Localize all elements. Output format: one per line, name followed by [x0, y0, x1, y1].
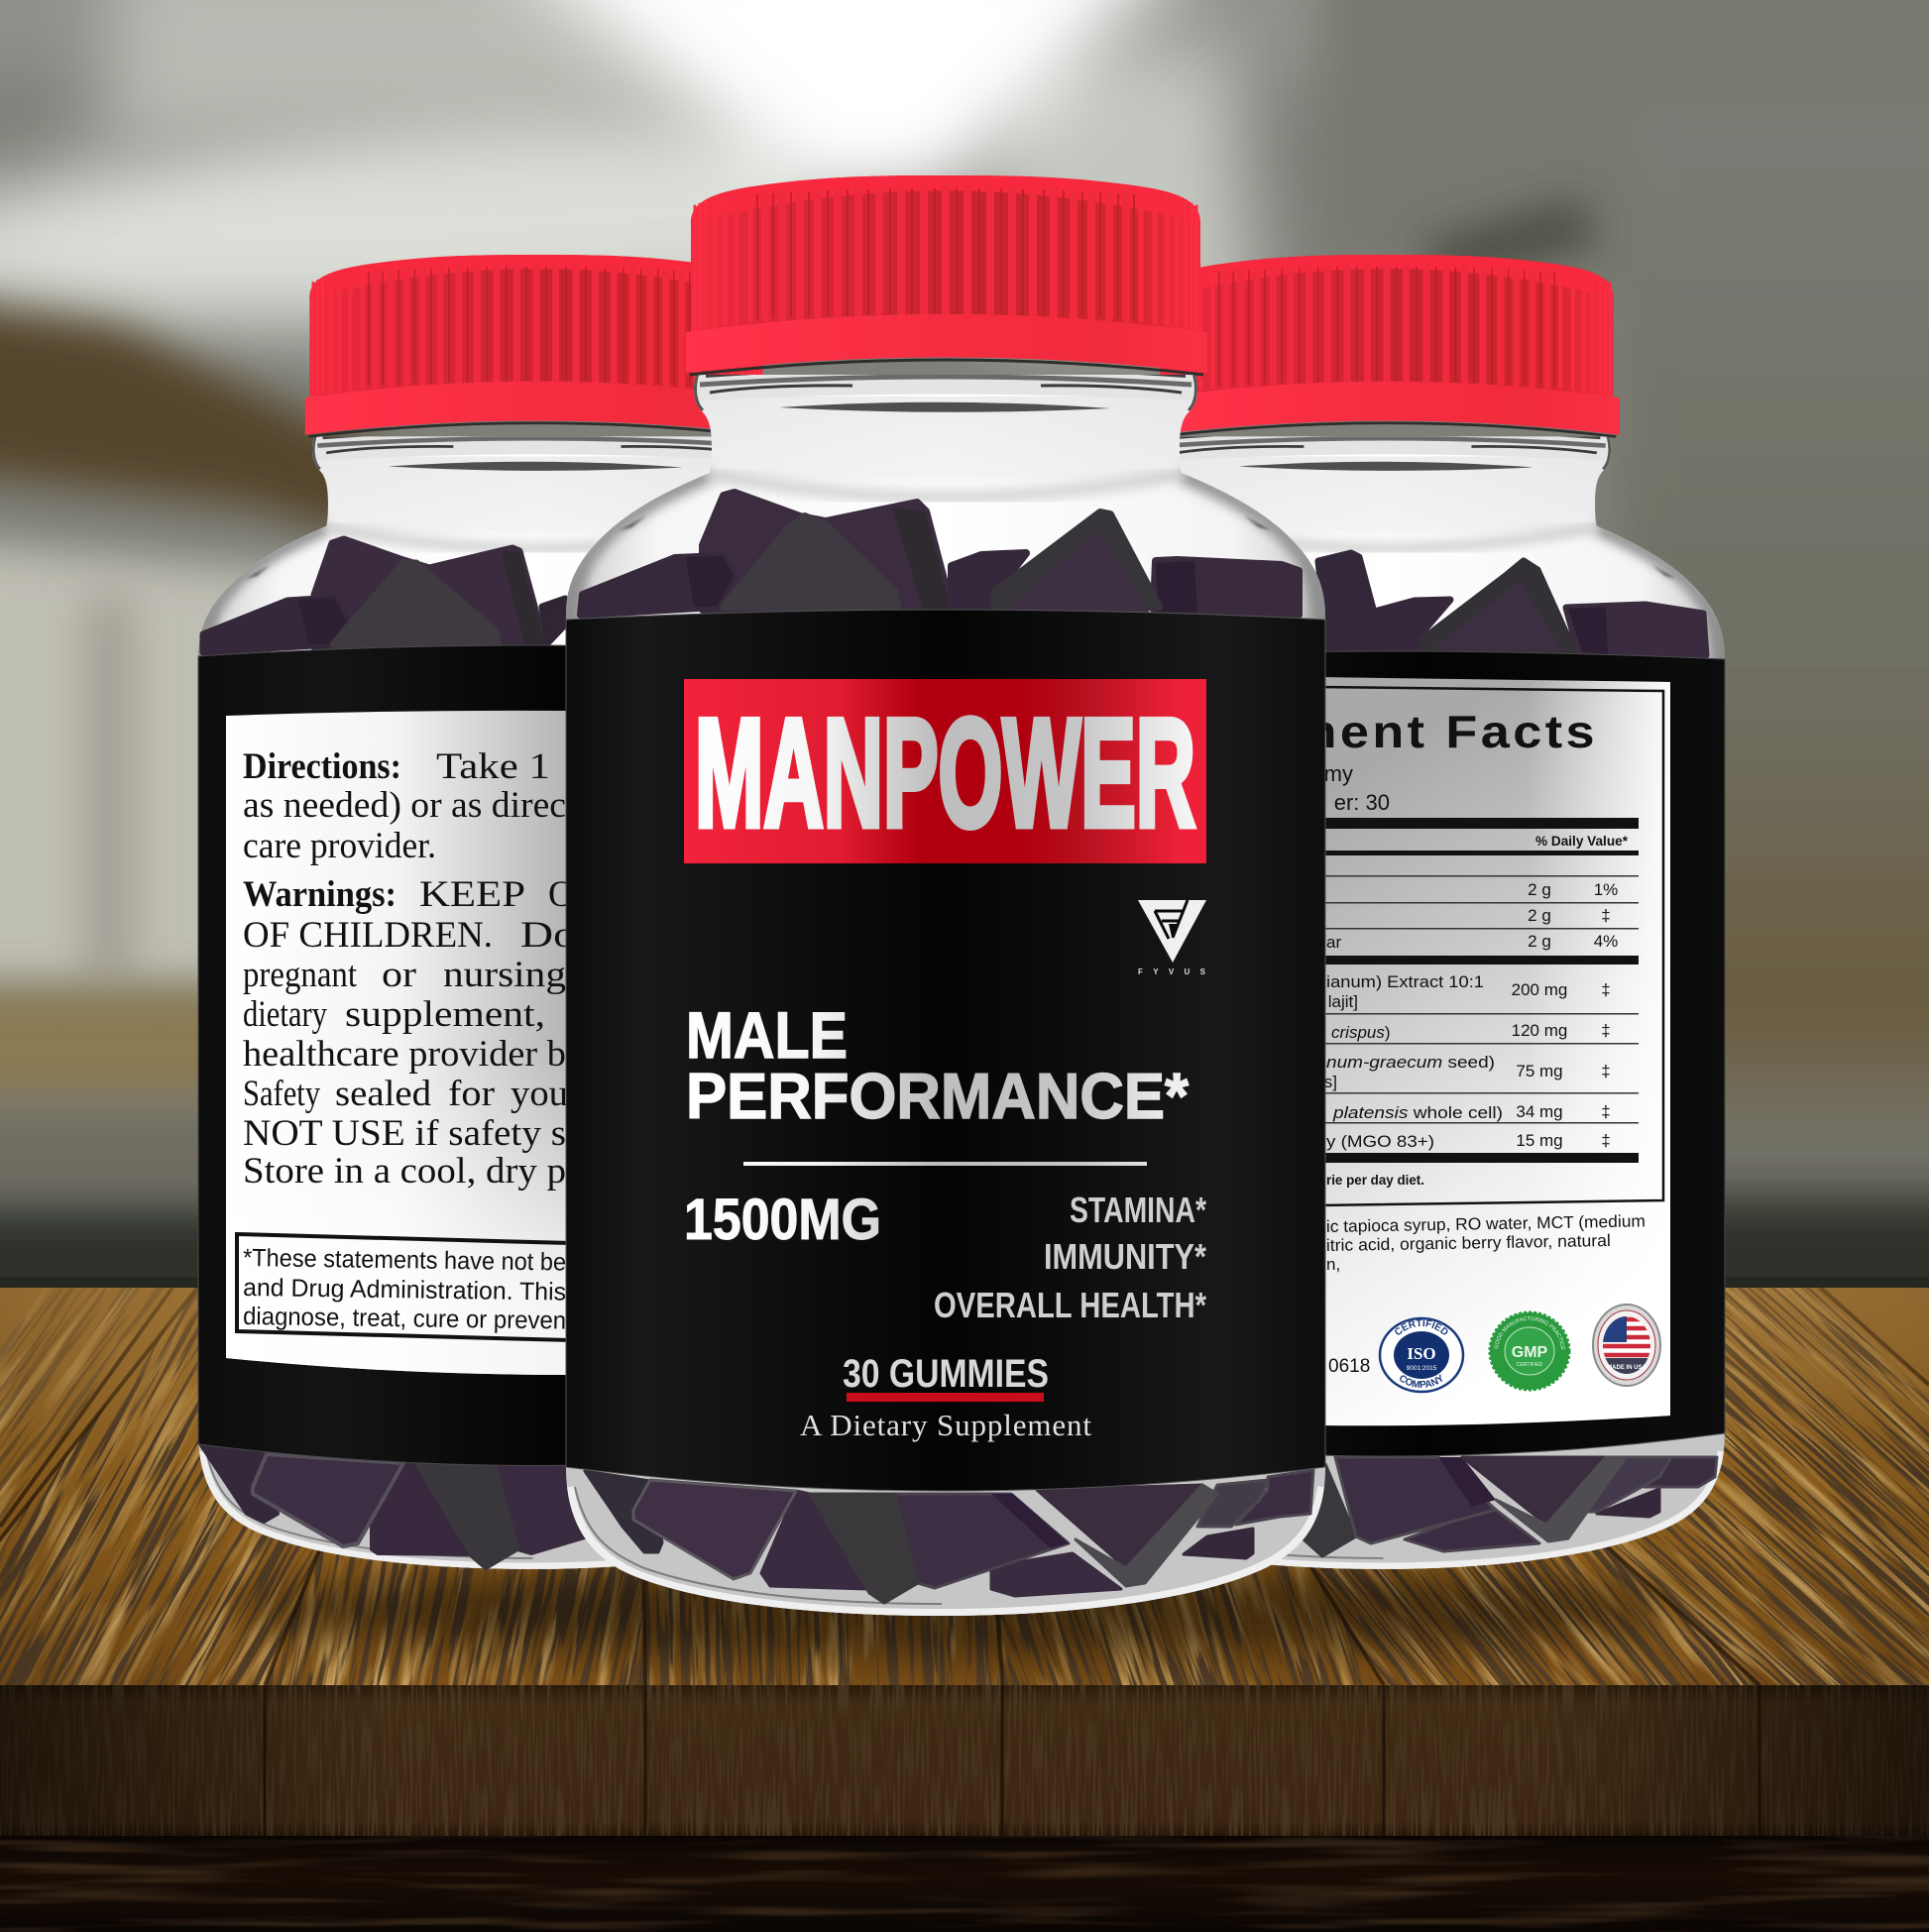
- right bottle gummies top: [1318, 553, 1706, 655]
- wooden table top with converging planks: [0, 1288, 1929, 1686]
- shadowed underside of the table: [0, 1836, 1929, 1932]
- badge: ISO certified: ISO: [1407, 1344, 1436, 1363]
- FDA disclaimer box on left label: diagnose, treat, cure or preven: [243, 1303, 566, 1335]
- directions text: Directions:: [243, 746, 401, 787]
- ingredient rows: ar: [1326, 933, 1341, 952]
- other ingredients: [1326, 1211, 1645, 1274]
- ingredient rows: crispus): [1331, 1023, 1391, 1042]
- ingredient rows: ‡: [1601, 906, 1611, 925]
- plank: [1608, 1288, 1929, 1685]
- badge: GMP certified: [1489, 1310, 1570, 1392]
- FDA disclaimer box on left label: *These statements have not be: [243, 1244, 566, 1277]
- ingredient rows: 15 mg: [1516, 1131, 1563, 1150]
- badge: made in USA: [1593, 1305, 1660, 1386]
- other ingredients: itric acid, organic berry flavor, natural: [1326, 1231, 1611, 1255]
- ingredient rows: 2 g: [1528, 906, 1551, 925]
- left bottle gummies top: [203, 539, 565, 652]
- ingredient rows: 200 mg: [1512, 980, 1567, 999]
- left bottle gummies bottom: [201, 1445, 588, 1568]
- center bottle gummies top: [581, 493, 1299, 615]
- right bottle black label: [1049, 651, 1725, 1456]
- right bottle: supplement facts side: [1039, 255, 1736, 1578]
- left bottle warnings text: O: [548, 874, 575, 915]
- left bottle warnings text: [243, 874, 576, 1192]
- ingredient rows: 2 g: [1528, 932, 1551, 951]
- icon: FYVUS logo: [1138, 900, 1206, 976]
- ingredient rows: ‡: [1601, 1062, 1611, 1080]
- center bottle: front of pack: [555, 175, 1338, 1626]
- badge: GMP certified: GMP: [1512, 1344, 1548, 1361]
- badge: ISO certified: COMPANY: [1400, 1374, 1443, 1388]
- ingredient rows: 120 mg: [1512, 1021, 1567, 1040]
- plank: [0, 1288, 319, 1685]
- right white panel: [1318, 677, 1670, 1425]
- supplement facts table: [1291, 687, 1663, 1377]
- left bottle warnings text: Store in a cool, dry p: [243, 1151, 566, 1192]
- table front face: [0, 1685, 1929, 1836]
- product headline: [686, 998, 1190, 1132]
- left bottle warnings text: Do: [520, 915, 576, 956]
- center bottle glass and cap: [555, 175, 1338, 1626]
- supplement line: A Dietary Supplement: [800, 1408, 1091, 1442]
- left bottle warnings text: Safety: [243, 1074, 320, 1114]
- FDA disclaimer box on left label: [237, 1234, 570, 1340]
- left bottle warnings text: KEEP: [419, 874, 525, 915]
- ingredient rows: 75 mg: [1516, 1062, 1563, 1080]
- left bottle warnings text: Warnings:: [243, 874, 397, 915]
- brand banner: MANPOWER: [695, 687, 1195, 858]
- other ingredients: n,: [1326, 1255, 1340, 1274]
- ingredient rows: ‡: [1601, 1102, 1611, 1121]
- red underline: [847, 1393, 1044, 1402]
- left bottle warnings text: pregnant: [243, 955, 358, 995]
- right bottle gummies bottom: [1304, 1457, 1717, 1556]
- left bottle warnings text: OF CHILDREN.: [243, 915, 493, 956]
- serving lines: my: [1324, 761, 1353, 786]
- product headline: PERFORMANCE*: [686, 1060, 1190, 1132]
- left bottle warnings text: healthcare provider b: [243, 1034, 566, 1075]
- badge: ISO certified: [1378, 1316, 1465, 1394]
- left bottle warnings text: dietary: [243, 994, 327, 1035]
- left white panel: [226, 711, 567, 1375]
- icon: FYVUS logo: FYVUS: [1138, 967, 1206, 976]
- dosage: 1500MG: [684, 1188, 881, 1252]
- benefits list: IMMUNITY*: [1044, 1236, 1206, 1277]
- ingredient rows: s]: [1324, 1073, 1337, 1091]
- left bottle: supplement directions side: [188, 255, 885, 1578]
- table rules: [1318, 818, 1639, 1163]
- divider: [743, 1162, 1147, 1166]
- plank: [1000, 1565, 1376, 1685]
- directions text: Take 1: [436, 746, 550, 787]
- plank: [1312, 1547, 1759, 1685]
- FDA disclaimer box on left label: and Drug Administration. This: [243, 1274, 566, 1307]
- left bottle black label: [198, 645, 874, 1465]
- center bottle gummies bottom: [585, 1470, 1313, 1603]
- left bottle warnings text: for: [448, 1074, 495, 1114]
- left bottle warnings text: or: [382, 955, 416, 995]
- facts heading: ment Facts: [1291, 706, 1598, 757]
- badge: ISO certified: CERTIFIED: [1395, 1319, 1448, 1334]
- benefits list: STAMINA*: [1070, 1190, 1206, 1230]
- ingredient rows: 4%: [1594, 932, 1618, 951]
- ingredient rows: 2 g: [1528, 880, 1551, 899]
- ingredient rows: 1%: [1594, 880, 1618, 899]
- badge: GMP certified: GOOD MANUFACTURING PRACTICE: [1495, 1316, 1565, 1350]
- ingredient rows: [1324, 880, 1618, 1151]
- badge: made in USA: MADE IN USA: [1607, 1365, 1646, 1371]
- plank: [266, 1550, 645, 1685]
- center black label: [566, 610, 1325, 1491]
- product headline: MALE: [686, 998, 848, 1072]
- left bottle glass and cap: [188, 255, 885, 1578]
- badge: GMP certified: CERTIFIED: [1517, 1362, 1543, 1368]
- badge: ISO certified: 9001:2015: [1407, 1365, 1437, 1372]
- brand banner: [684, 679, 1206, 863]
- phone fragment: 0618: [1328, 1356, 1370, 1377]
- directions text: care provider.: [243, 826, 436, 866]
- directions text: [243, 746, 566, 866]
- plank: [0, 1288, 165, 1523]
- directions text: as needed) or as direc: [243, 785, 566, 826]
- right bottle glass and cap: [1039, 255, 1736, 1578]
- left bottle warnings text: supplement,: [345, 994, 545, 1035]
- daily value heading: % Daily Value*: [1535, 833, 1629, 849]
- left bottle warnings text: nursing: [443, 955, 566, 995]
- other ingredients: ic tapioca syrup, RO water, MCT (medium: [1326, 1211, 1645, 1236]
- blurred room background: [0, 0, 1929, 1323]
- ingredient rows: ‡: [1601, 1021, 1611, 1040]
- left bottle warnings text: sealed: [335, 1074, 432, 1114]
- benefits list: OVERALL HEALTH*: [934, 1285, 1206, 1325]
- left bottle warnings text: you: [511, 1074, 568, 1114]
- ingredient rows: platensis whole cell): [1332, 1103, 1503, 1122]
- ingredient rows: num-graecum seed): [1326, 1053, 1495, 1072]
- ingredient rows: ‡: [1601, 1131, 1611, 1150]
- left bottle warnings text: NOT USE if safety s: [243, 1113, 566, 1154]
- plank: [644, 1580, 1001, 1685]
- count: 30 GUMMIES: [843, 1352, 1049, 1396]
- ingredient rows: y (MGO 83+): [1326, 1132, 1434, 1151]
- footnote: rie per day diet.: [1326, 1173, 1424, 1188]
- ingredient rows: lajit]: [1328, 992, 1358, 1011]
- ingredient rows: 34 mg: [1516, 1102, 1563, 1121]
- benefits list: [934, 1190, 1206, 1325]
- supplement facts table: er: 30: [1334, 790, 1390, 815]
- ingredient rows: ‡: [1601, 980, 1611, 999]
- ingredient rows: ianum) Extract 10:1: [1326, 972, 1484, 991]
